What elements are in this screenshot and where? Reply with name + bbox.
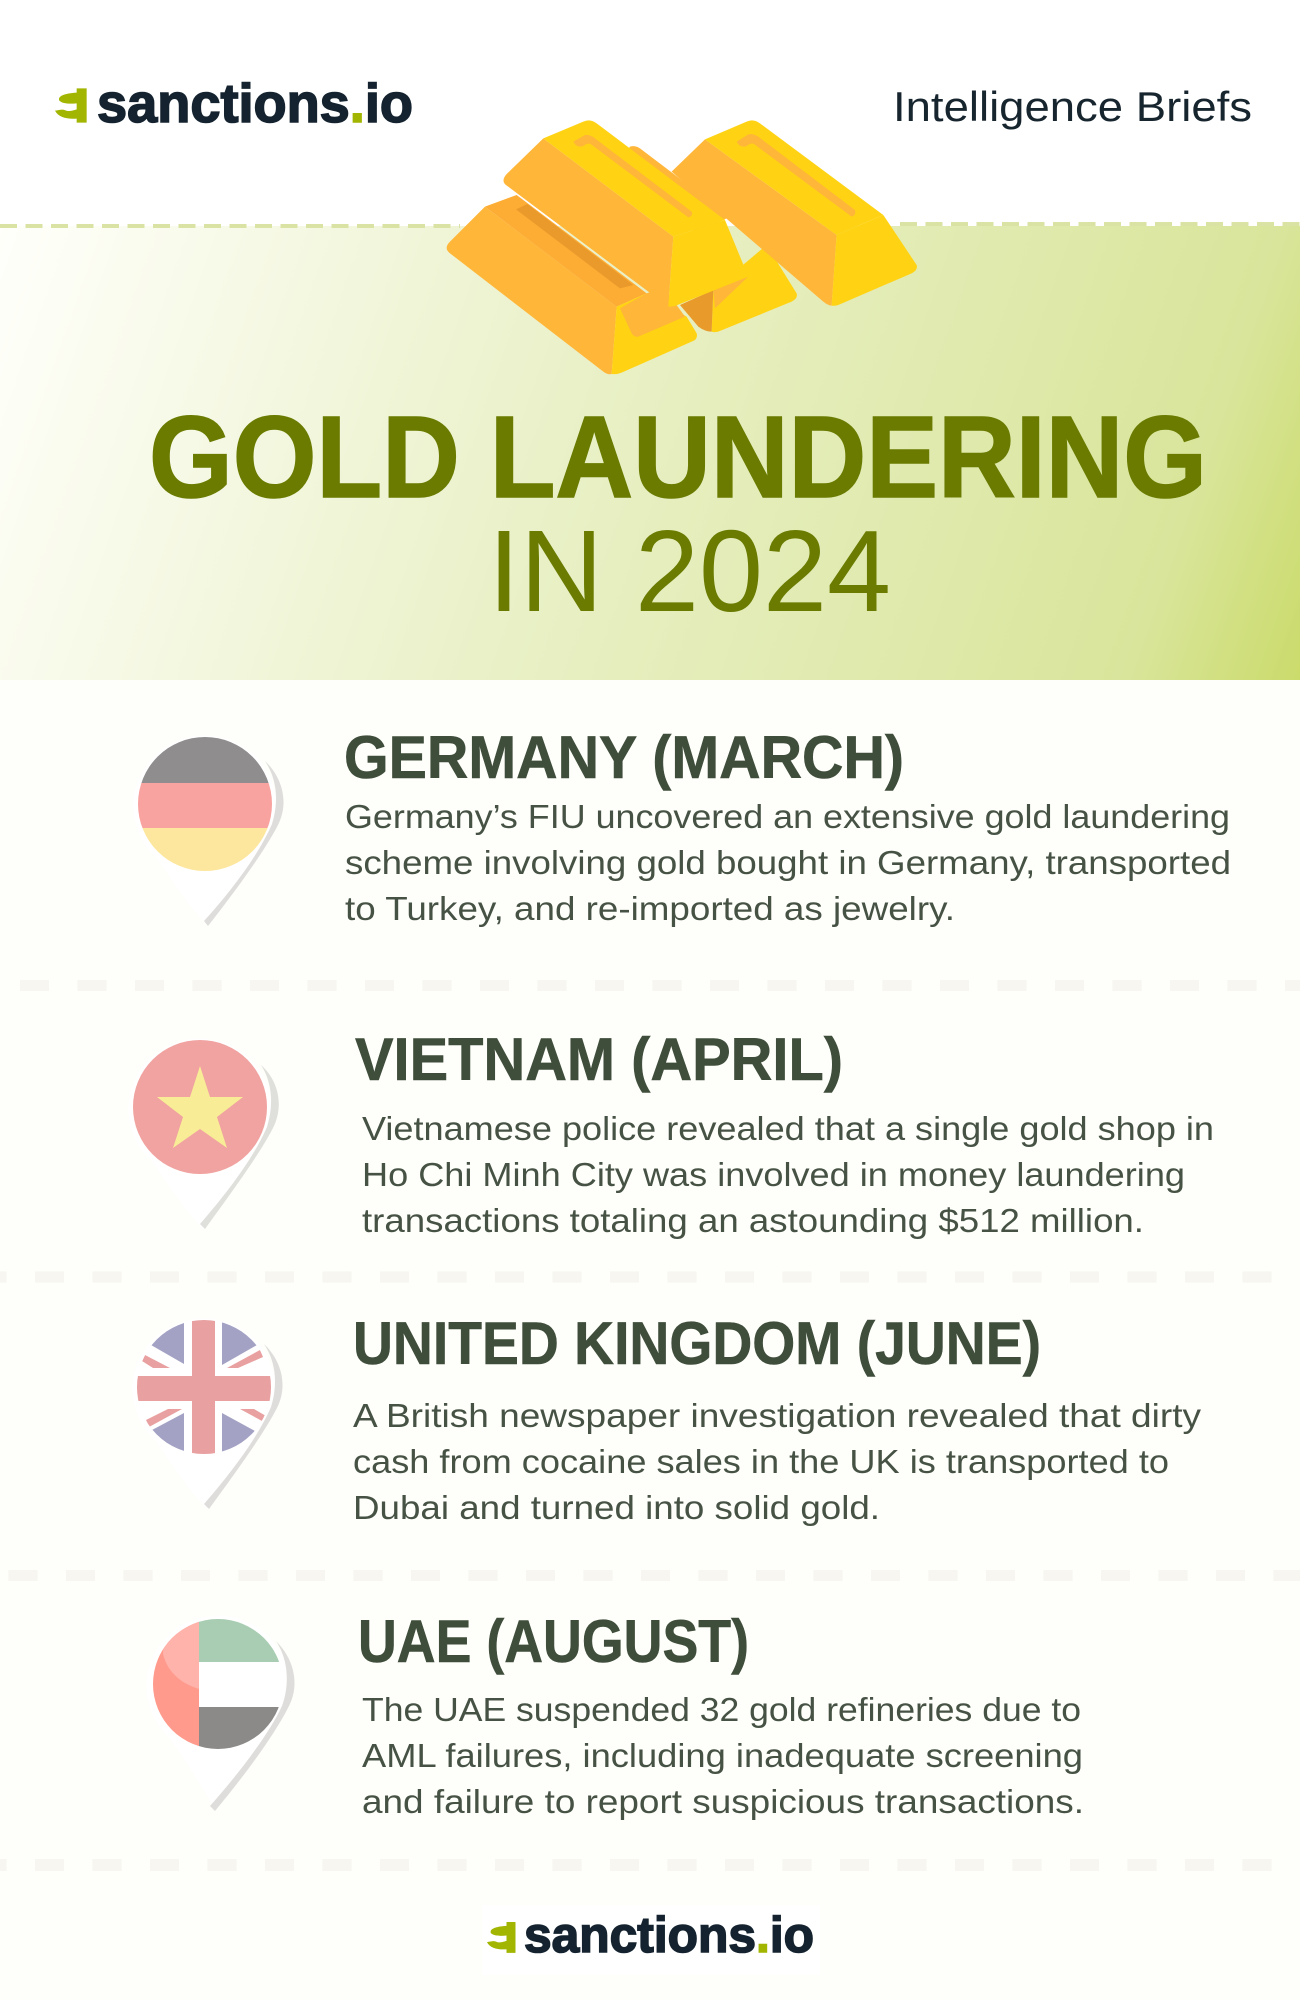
body text: The UAE suspended 32 gold refineries due to [362, 1691, 1081, 1728]
logo icon [487, 1922, 516, 1953]
panel: united kingdom [124, 1307, 1202, 1526]
header logo: sanctions.io [55, 72, 413, 134]
body text [362, 1691, 1084, 1820]
body text: Germany’s FIU uncovered an extensive gold laundering [345, 798, 1230, 835]
panel: germany [133, 724, 1231, 927]
panel: uae [146, 1608, 1084, 1820]
title line 2: IN 2024 [488, 506, 891, 636]
body text: transactions totaling an astounding $512 million. [362, 1202, 1144, 1239]
body text: AML failures, including inadequate screening [362, 1737, 1083, 1774]
body text: Vietnamese police revealed that a single gold shop in [362, 1110, 1214, 1147]
heading: UNITED KINGDOM (JUNE) [353, 1310, 1041, 1377]
body text: A British newspaper investigation revealed that dirty [353, 1397, 1202, 1434]
title line 1: GOLD LAUNDERING [149, 392, 1207, 522]
icon: gold bars [447, 120, 917, 374]
body text [362, 1110, 1214, 1239]
middle back bar [617, 146, 797, 332]
right bar [672, 120, 917, 306]
footer logo: sanctions.io [482, 1905, 820, 1975]
header label: Intelligence Briefs [893, 83, 1252, 130]
body text: to Turkey, and re-imported as jewelry. [345, 890, 955, 927]
panel: vietnam [128, 1026, 1214, 1239]
lower left bar [447, 195, 697, 374]
pin: union jack [137, 1320, 282, 1509]
pin: vietnamese flag [128, 1039, 279, 1229]
body text [353, 1397, 1202, 1526]
front top bar [503, 120, 748, 307]
pin: uae flag [146, 1616, 295, 1811]
heading: GERMANY (MARCH) [344, 724, 904, 791]
body text [345, 798, 1231, 927]
body text: Dubai and turned into solid gold. [353, 1489, 880, 1526]
body text: and failure to report suspicious transactions. [362, 1783, 1084, 1820]
logo wordmark: sanctions.io [524, 1907, 814, 1963]
logo icon [55, 88, 87, 123]
heading: VIETNAM (APRIL) [355, 1026, 843, 1093]
body text: Ho Chi Minh City was involved in money laundering [362, 1156, 1185, 1193]
body text: scheme involving gold bought in Germany, transported [345, 844, 1231, 881]
heading: UAE (AUGUST) [358, 1608, 749, 1675]
hero gradient band [0, 226, 1300, 680]
pin: german flag [133, 736, 284, 926]
title [149, 392, 1207, 636]
logo wordmark: sanctions.io [97, 72, 413, 134]
body text: cash from cocaine sales in the UK is transported to [353, 1443, 1169, 1480]
